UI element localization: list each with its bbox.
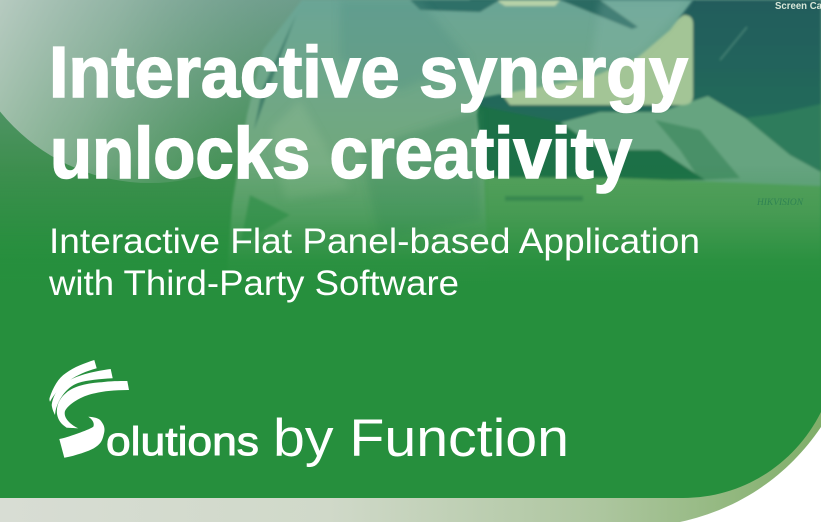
title bbox=[49, 33, 688, 194]
photo: far mountain bbox=[748, 104, 821, 170]
title: unlocks creativity bbox=[50, 114, 632, 194]
subtitle: with Third-Party Software bbox=[48, 264, 459, 303]
title: Interactive synergy bbox=[49, 33, 688, 113]
bottom curved band bbox=[0, 380, 821, 522]
subtitle: Interactive Flat Panel-based Application bbox=[49, 222, 700, 261]
photo: soft shirt shading bbox=[274, 1, 678, 222]
photo: person in shirt bbox=[230, 0, 694, 254]
photo: mountain shadows bbox=[655, 120, 740, 180]
photo: display bezel bbox=[483, 176, 821, 252]
photo: meteor streak bbox=[720, 27, 747, 60]
pale corner circle bbox=[0, 0, 241, 183]
photo: logo mark: HIKVISION bbox=[756, 197, 804, 207]
subtitle bbox=[48, 222, 700, 303]
heading: by Function: by Function bbox=[273, 409, 569, 468]
photo: pale card bbox=[500, 15, 693, 105]
logo: Solutions wordmark: olutions bbox=[106, 420, 259, 464]
logo: swoosh S icon bbox=[49, 360, 129, 458]
fade to green bbox=[109, 180, 821, 306]
photo: dark foreground hill bbox=[470, 104, 705, 180]
photo: snowy mountain bbox=[540, 96, 821, 190]
photo: display screen bbox=[470, 0, 821, 252]
